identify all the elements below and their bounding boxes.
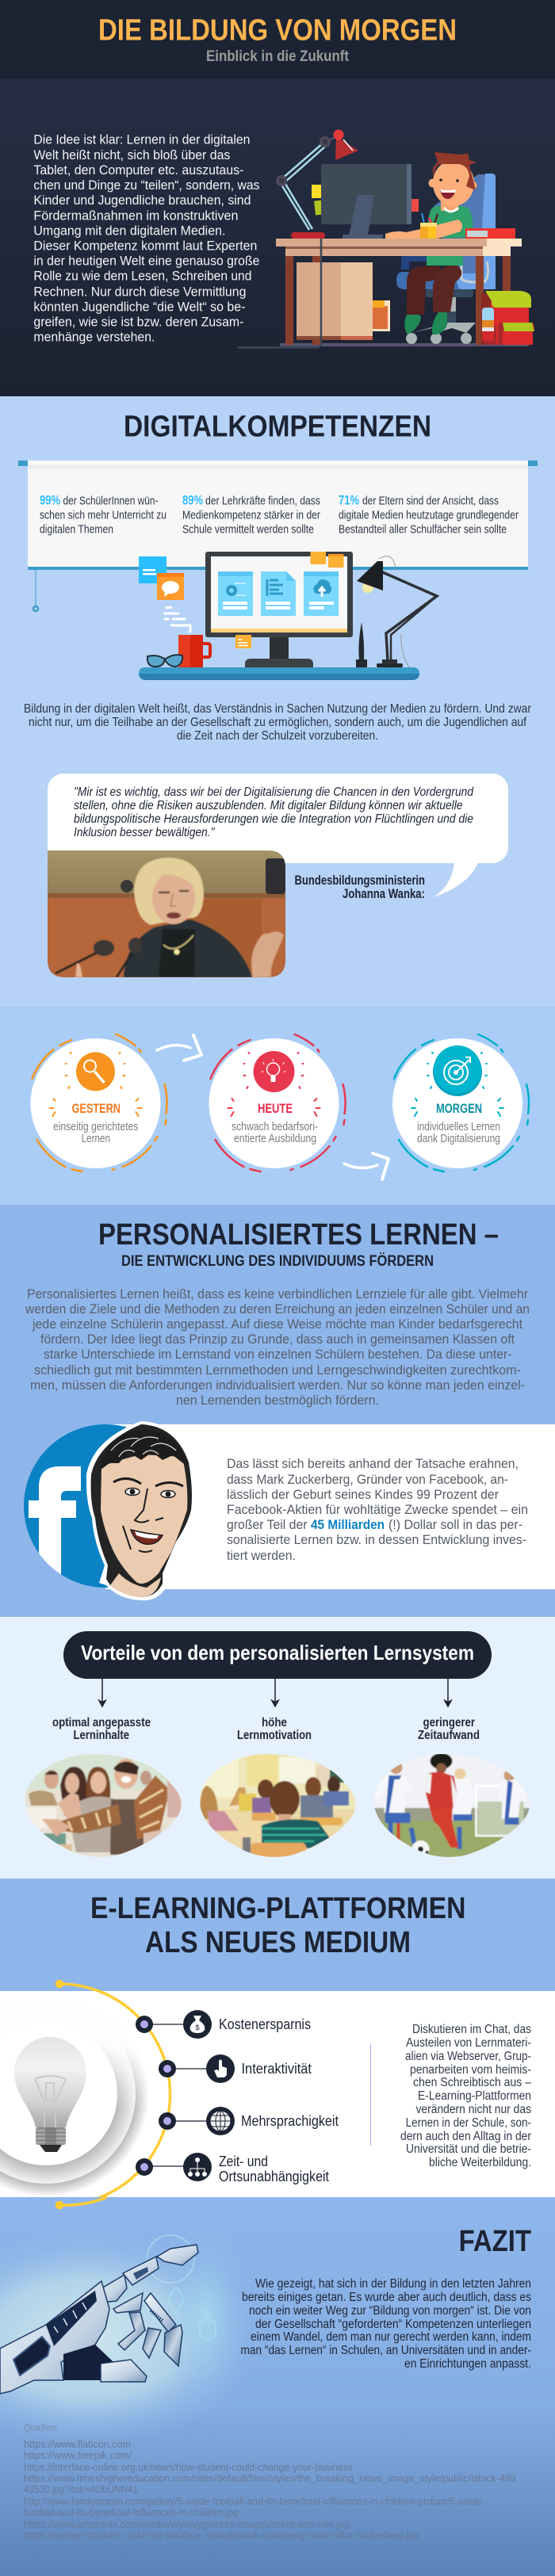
text: e-learning description: Universität und die betrie- bbox=[406, 2142, 531, 2156]
intro text: Umgang mit den digitalen Medien. bbox=[33, 224, 225, 239]
intro text: Dieser Kompetenz kommt laut Experten bbox=[33, 239, 257, 254]
illustration: desk with monitor bbox=[139, 552, 437, 680]
ball bbox=[412, 1840, 430, 1858]
icon: magnifier bbox=[76, 1053, 115, 1091]
text: lässlich der Geburt seines Kindes 99 Prozent der bbox=[227, 1487, 499, 1502]
stat: 99 percent: der SchülerInnen wün- bbox=[63, 495, 159, 508]
desk surface bbox=[139, 667, 419, 680]
floating documents bbox=[139, 556, 166, 583]
text: Facebook-Aktien für wohltätige Zwecke spendet – ein bbox=[227, 1502, 528, 1517]
heading: E-LEARNING-PLATTFORMEN bbox=[90, 1892, 466, 1925]
front desk leg bbox=[476, 256, 484, 345]
heading: FAZIT bbox=[459, 2225, 531, 2258]
item: Zeit- und Ortsunabhängigkeit: Ortsunabhängigkeit bbox=[219, 2169, 329, 2184]
sources: https://www.ampronix.com/media/wysiwyg/press-images/robot-arm-min.jpg bbox=[24, 2518, 350, 2530]
conclusion text bbox=[241, 2277, 531, 2371]
benefit labels: geringerer bbox=[423, 1716, 475, 1729]
benefit labels: Zeitaufwand bbox=[418, 1729, 480, 1742]
left player bbox=[390, 1761, 403, 1774]
icon: light bulb bbox=[254, 1051, 295, 1092]
arrow: heute to morgen bbox=[344, 1153, 388, 1179]
text: dass Mark Zuckerberg, Gründer von Facebook, an- bbox=[227, 1472, 508, 1487]
text: e-learning description: penarbeiten vom heimis- bbox=[410, 2063, 531, 2077]
stat: 99 percent: schen sich mehr Unterricht zu bbox=[40, 510, 166, 522]
paragraph: digital education bbox=[24, 702, 532, 743]
text: 45 Milliarden bbox=[311, 1517, 385, 1532]
paragraph: starke Unterschiede im Lernstand von einzelnen Schülern bestehen. Da diese unter- bbox=[44, 1347, 512, 1362]
text: e-learning description: alien via Webserver, Grup- bbox=[405, 2050, 531, 2063]
description bbox=[53, 1121, 138, 1145]
desk lamp bbox=[291, 232, 325, 239]
panel: advantages bbox=[0, 1617, 555, 1878]
icon: target bbox=[433, 1045, 482, 1096]
photo: classroom bbox=[199, 1754, 358, 1859]
heading bbox=[90, 1892, 466, 1959]
panel: Fazit bbox=[0, 2197, 555, 2576]
sources: football-and-its-beneficial-influences-in-children.jpg bbox=[24, 2506, 239, 2518]
hand and forearm bbox=[0, 2281, 109, 2394]
conclusion text: en Einrichtungen anpasst. bbox=[404, 2357, 531, 2371]
red books bbox=[465, 228, 515, 239]
panel: e-learning platforms bbox=[0, 1878, 555, 2209]
text: großer Teil der bbox=[227, 1517, 308, 1532]
boy torso bbox=[428, 204, 473, 238]
item: Kostenersparnis bbox=[136, 2010, 311, 2039]
intro text: Rechnen. Nur durch diese Vermittlung bbox=[33, 285, 246, 300]
panel: introduction bbox=[0, 79, 555, 396]
text: tiert werden. bbox=[227, 1548, 296, 1563]
thumb bbox=[63, 2345, 113, 2380]
intro text bbox=[33, 132, 259, 345]
sources: https://www.flaticon.com bbox=[24, 2438, 131, 2450]
arrow: gestern to heute bbox=[157, 1035, 201, 1061]
backpack bbox=[481, 301, 529, 345]
sources: 43530.jpg?itok=4ObUNN41 bbox=[24, 2483, 138, 2495]
black lamp bbox=[401, 634, 409, 667]
pill heading bbox=[63, 1631, 492, 1679]
paragraph: nen Lernenden bestmöglich fördern. bbox=[176, 1393, 379, 1408]
glasses bbox=[147, 655, 182, 667]
text bbox=[227, 1456, 528, 1563]
portrait: Mark Zuckerberg bbox=[86, 1421, 196, 1600]
stat: 71 percent: digitale Medien heutzutage grundlegender bbox=[339, 510, 519, 522]
benefit labels: höhe bbox=[262, 1716, 287, 1729]
item: Interaktivität: Interaktivität bbox=[241, 2061, 312, 2077]
paragraph: jede einzelne Schülerin angepasst. Auf diese Weise möchte man Kinder bedarfsgerecht bbox=[32, 1317, 522, 1332]
paragraph: schiedlich gut mit bestimmten Lernmethoden und Lerngeschwindigkeiten zurechtkom- bbox=[34, 1363, 521, 1378]
icon: pointing hand bbox=[206, 2054, 235, 2083]
description bbox=[232, 1121, 318, 1145]
icon: globe bbox=[206, 2107, 235, 2135]
third player bbox=[455, 1768, 466, 1779]
item: Mehrsprachigkeit bbox=[159, 2107, 339, 2135]
arrows bbox=[98, 1679, 452, 1707]
icon: facebook circle bbox=[24, 1424, 127, 1588]
man bbox=[110, 1799, 144, 1855]
description: entierte Ausbildung bbox=[234, 1133, 316, 1145]
speech bubble bbox=[48, 774, 508, 897]
subtitle: Einblick in die Zukunft bbox=[206, 48, 349, 65]
intro text: könnten Jugendliche “die Welt“ so be- bbox=[33, 300, 245, 315]
quote text: Inklusion besser bewältigen." bbox=[74, 826, 216, 839]
text: e-learning description: Diskutieren im Chat, das bbox=[412, 2023, 531, 2036]
intro text: Welt heißt nicht, sich bloß über das bbox=[33, 147, 230, 162]
description: dank Digitalisierung bbox=[417, 1133, 500, 1145]
item: Zeit- und Ortsunabhängigkeit bbox=[136, 2153, 329, 2184]
stat: 89 percent: Medienkompetenz stärker in der bbox=[182, 510, 320, 522]
heading: PERSONALISIERTES LERNEN – bbox=[98, 1218, 499, 1252]
sources bbox=[24, 2421, 515, 2541]
step: Gestern bbox=[30, 1034, 167, 1171]
attribution bbox=[295, 873, 425, 901]
step: Heute bbox=[209, 1034, 346, 1171]
intro text: Kinder und Jugendliche brauchen, sind bbox=[33, 193, 251, 208]
photo: cheering students bbox=[25, 1754, 183, 1859]
sources: https://interface-online.org.uk/news/how-student-could-change-your-business bbox=[24, 2461, 353, 2473]
text: e-learning description: dern auch den Alltag in der bbox=[400, 2130, 531, 2143]
stat: 71 percent: Bestandteil aller Schulfächer sein sollte bbox=[339, 524, 507, 537]
stat: 71 percent bbox=[339, 493, 519, 537]
icon: money bag bbox=[183, 2010, 212, 2039]
stat: 99 percent bbox=[40, 493, 166, 537]
fingers bbox=[118, 2312, 145, 2350]
drawer cabinet bbox=[297, 262, 341, 340]
desk top bbox=[276, 239, 522, 247]
quote text: "Mir ist es wichtig, dass wir bei der Digitalisierung die Chancen in den Vordergrund bbox=[74, 785, 474, 799]
monitor with notes bbox=[312, 185, 322, 198]
sticky notes bbox=[311, 552, 326, 564]
intro text: Die Idee ist klar: Lernen in der digitalen bbox=[33, 132, 250, 147]
monitor bbox=[270, 637, 289, 660]
red mug bbox=[203, 644, 210, 657]
paragraph: digital education: die Zeit nach der Schulzeit vorzubereiten. bbox=[177, 729, 378, 743]
text: e-learning description: verändern nicht nur das bbox=[415, 2103, 531, 2116]
paragraph: fördern. Der Idee liegt das Prinzip zu Grunde, dass auch in gemeinsamen Klassen oft bbox=[40, 1332, 515, 1347]
intro text: greifen, wie sie ist bzw. deren Zusam- bbox=[33, 315, 243, 330]
panel: timeline bbox=[0, 1007, 555, 1205]
text: (!) Dollar soll in das per- bbox=[388, 1517, 522, 1532]
girl bbox=[60, 1767, 87, 1816]
intro text: Rolle zu wie dem Lesen, Schreiben und bbox=[33, 269, 251, 284]
red player bbox=[430, 1753, 452, 1769]
label: MORGEN bbox=[436, 1102, 482, 1116]
text: e-learning description: E-Learning-Plattformen bbox=[418, 2089, 531, 2103]
text: e-learning description: Lernen in der Schule, son- bbox=[406, 2116, 531, 2130]
benefit labels: Lerninhalte bbox=[73, 1729, 129, 1742]
stat: 71 percent: 71% bbox=[339, 493, 359, 508]
step: Morgen bbox=[392, 1034, 529, 1171]
description: Lernen bbox=[82, 1133, 110, 1145]
subheading: DIE ENTWICKLUNG DES INDIVIDUUMS FÖRDERN bbox=[121, 1253, 434, 1270]
photo: football bbox=[373, 1753, 531, 1859]
hair bbox=[100, 1430, 187, 1470]
stat: 99 percent: 99% bbox=[40, 493, 60, 508]
boy head bbox=[433, 160, 474, 206]
intro text: in der heutigen Welt eine genauso große bbox=[33, 254, 259, 269]
pencil cup bbox=[422, 213, 424, 224]
item: Kostenersparnis: Kostenersparnis bbox=[219, 2016, 311, 2032]
sources: Quellen: bbox=[24, 2421, 59, 2433]
item: Interaktivität bbox=[159, 2054, 312, 2083]
steam dashes bbox=[165, 607, 190, 632]
right player bbox=[504, 1770, 515, 1781]
boy arm bbox=[385, 220, 462, 239]
panel: Digitalkompetenzen bbox=[0, 396, 555, 1007]
icon: hierarchy bbox=[183, 2153, 212, 2181]
title: DIE BILDUNG VON MORGEN bbox=[98, 14, 457, 48]
item: Zeit- und Ortsunabhängigkeit: Zeit- und bbox=[219, 2154, 268, 2169]
nose bbox=[135, 1489, 163, 1522]
eyes and brows bbox=[113, 1478, 183, 1486]
panel: personalised learning bbox=[0, 1205, 555, 1617]
office chair bbox=[434, 174, 496, 289]
section: header bbox=[0, 0, 555, 79]
folder under desk bbox=[373, 300, 390, 331]
projection screen bbox=[18, 461, 538, 611]
quote text: stellen, ohne die Risiken auszublenden. Mit digitaler Bildung können wir aktuelle bbox=[74, 799, 463, 812]
label: GESTERN bbox=[71, 1102, 121, 1116]
illustration: boy at desk bbox=[238, 130, 534, 347]
heading: DIGITALKOMPETENZEN bbox=[124, 411, 431, 444]
stat: 71 percent: der Eltern sind der Ansicht, dass bbox=[362, 495, 499, 508]
text: e-learning description bbox=[400, 2023, 531, 2169]
illustration: light bulb bbox=[0, 2037, 147, 2196]
text: e-learning description: chen Schreibtisch aus – bbox=[413, 2076, 531, 2089]
stat: 99 percent: digitalen Themen bbox=[40, 524, 113, 537]
quote text bbox=[74, 785, 474, 839]
conclusion text: der Gesellschaft “geforderten“ Kompetenzen unterliegen bbox=[255, 2318, 531, 2331]
sources: https://www.freepik.com/ bbox=[24, 2449, 132, 2461]
quote text: bildungspolitische Herausforderungen wie die Integration von Flüchtlingen und die bbox=[74, 812, 473, 826]
stat: 89 percent: der Lehrkräfte finden, dass bbox=[205, 495, 320, 508]
pill heading: Vorteile von dem personalisierten Lernsystem bbox=[81, 1641, 474, 1664]
intro text: chen und Dinge zu “teilen“, sondern, was bbox=[33, 178, 259, 193]
yellow arc bbox=[56, 1980, 170, 2209]
intro text: Tablet, den Computer etc. auszutaus- bbox=[33, 162, 243, 178]
index finger bbox=[98, 2275, 127, 2303]
monitor cards bbox=[218, 571, 253, 616]
description: individuelles Lernen bbox=[417, 1121, 500, 1133]
stat: 89 percent bbox=[182, 493, 320, 537]
sources: https://bumper-stickers.ru/47630-thickbox_default/mark-cukerberg-mark-elliot-zuckerberg.jpg bbox=[24, 2529, 419, 2541]
paragraph: men, müssen die Anforderungen individualisiert werden. Nur so könne man jeden einzel- bbox=[30, 1378, 525, 1393]
floor and cable bbox=[280, 343, 529, 346]
text: e-learning description: Austeilen von Lernmateri- bbox=[406, 2036, 531, 2050]
paragraph: Personalisiertes Lernen heißt, dass es keine verbindlichen Lernziele für alle gibt. Vielmehr bbox=[27, 1286, 528, 1301]
stat: 89 percent: Schule vermittelt werden sollte bbox=[182, 524, 314, 537]
icon: money bag: $ bbox=[195, 2024, 200, 2031]
benefit labels bbox=[52, 1716, 480, 1742]
band: Zuckerberg bbox=[24, 1421, 555, 1600]
description: einseitig gerichtetes bbox=[53, 1121, 138, 1133]
attribution: Johanna Wanka: bbox=[343, 887, 425, 901]
boy legs bbox=[407, 266, 441, 315]
sources: http://www.familyocean.com/gallery/5-aside-football-and-its-beneficial-influences-in-children-picture/5-aside bbox=[24, 2495, 482, 2507]
stat: 89 percent: 89% bbox=[182, 493, 203, 508]
intro text: Fördermaßnahmen im konstruktiven bbox=[33, 208, 238, 224]
attribution: Bundesbildungsministerin bbox=[295, 873, 425, 888]
benefit labels: Lernmotivation bbox=[237, 1729, 312, 1742]
desk legs bbox=[285, 256, 293, 345]
description: schwach bedarfsori- bbox=[232, 1121, 318, 1133]
intro text: menhänge verstehen. bbox=[33, 330, 155, 345]
text: sonalisierte Lernen bzw. in dessen Entwicklung inves- bbox=[227, 1532, 526, 1547]
benefit labels: optimal angepasste bbox=[52, 1716, 151, 1729]
text: Das lässt sich bereits anhand der Tatsache erahnen, bbox=[227, 1456, 519, 1471]
image: robot hand bbox=[0, 2219, 262, 2445]
item: Mehrsprachigkeit: Mehrsprachigkeit bbox=[241, 2113, 339, 2129]
pen bbox=[356, 622, 367, 667]
photo: Johanna Wanka bbox=[48, 850, 285, 977]
heading: ALS NEUES MEDIUM bbox=[145, 1926, 411, 1959]
mouth bbox=[131, 1530, 163, 1544]
paragraph bbox=[25, 1286, 530, 1408]
description bbox=[417, 1121, 500, 1145]
label: HEUTE bbox=[258, 1102, 293, 1116]
sources: https://www.timeshighereducation.com/sites/default/files/styles/the_breaking_news_image_style/public/istock-499 bbox=[24, 2472, 515, 2484]
text: e-learning description: bliche Weiterbildung. bbox=[429, 2156, 531, 2169]
